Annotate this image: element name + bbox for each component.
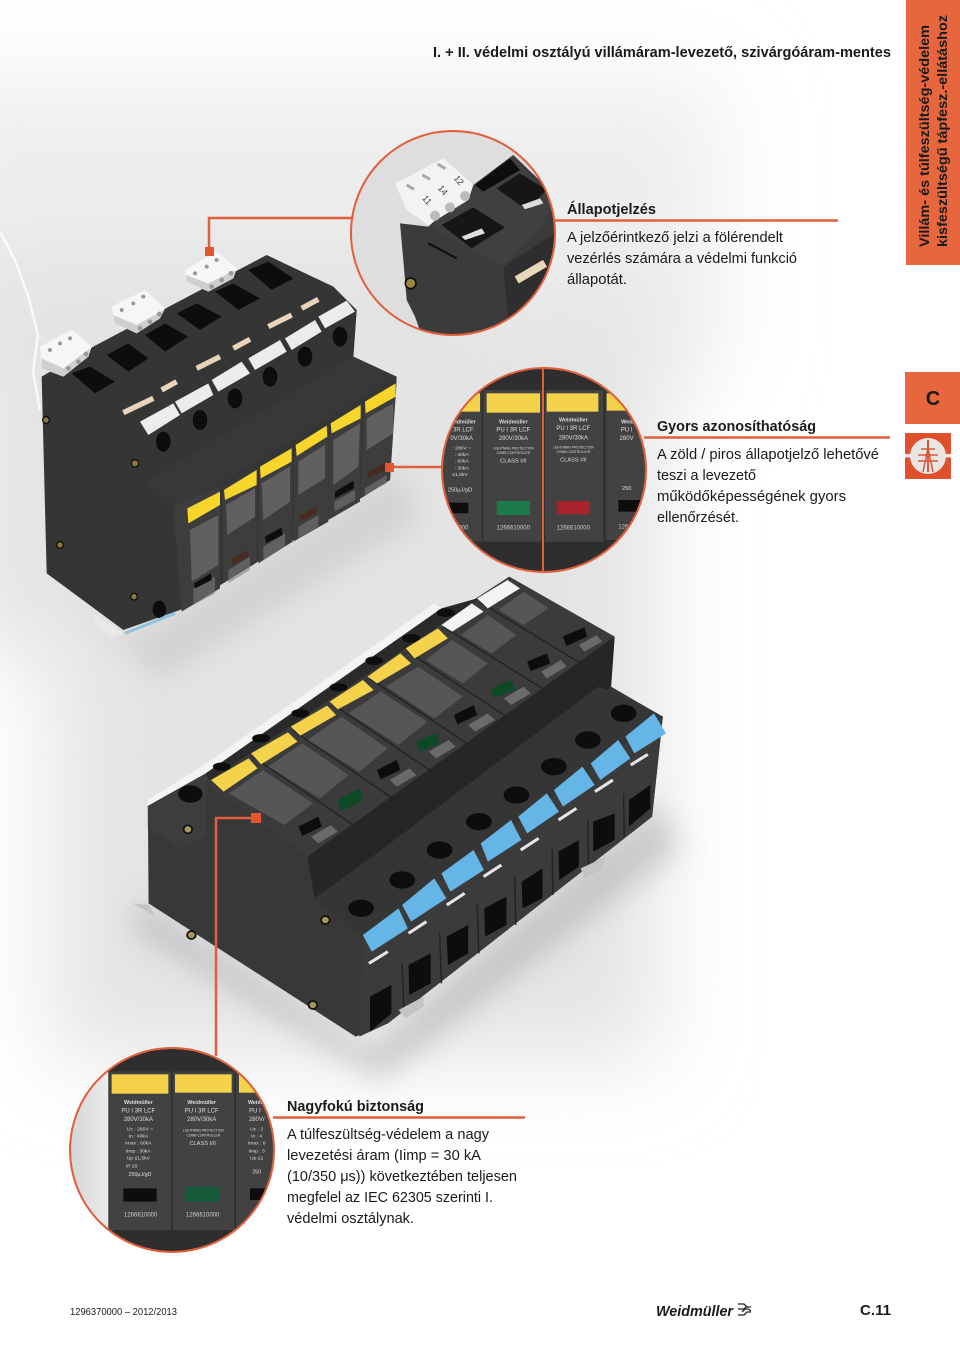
detail circle: green and red indicators: 250μJ/gD [448,488,472,494]
detail circle: green and red indicators: 250 [622,486,631,492]
text block: status signal [554,201,838,288]
brass screws [184,825,330,1009]
upper product photo: surge arrester with white terminals [40,252,397,638]
lower row front faces [359,717,663,1037]
title: I. + II. védelmi osztályú villámáram-levezető, szivárgóáram-mentes [433,45,891,61]
contact rods [123,299,318,413]
detail circle: green and red indicators: : 30kA [455,465,469,471]
yellow module labels [187,383,396,523]
detail circle: green and red indicators: : 40kA [455,452,469,458]
din rail blue strip [125,613,175,633]
text block: status signal: A jelzőérintkező jelzi a fölérendelt [567,230,783,246]
detail circle: module front: Up ≤1,5kV [127,1155,151,1161]
detail circle: green and red indicators: Weidmüller [499,419,528,425]
detail circle: green and red indicators: 280V [620,436,634,442]
connector line: safety [216,813,261,1056]
detail circle: green and red indicators: 1266610000 [497,525,531,531]
detail circle: module front: CLASS I/II [189,1141,216,1147]
din rail clips [132,857,606,1018]
detail circle: module front: Imax : 6 [248,1141,266,1147]
status windows [299,627,587,836]
detail circle: module front: Iimp : 30kA [126,1148,151,1154]
detail circle: green and red indicators: : 280V ~ [452,445,471,451]
detail circle: green and red indicators: COMB CONTROLLER [557,450,591,454]
detail circle: green and red indicators: COMB CONTROLLER [497,451,531,455]
sidebar chapter tab: Villám- és túlfeszültség-védelem [916,25,932,247]
detail circle: green and red indicators: 280V/30kA [559,435,588,441]
detail circle: signal terminal [350,130,556,336]
detail circle: green and red indicators: LIGHTNING PROTECTION [493,446,534,450]
detail circle: green and red indicators: LIGHTNING PROTECTION [553,445,594,449]
module divider lines [253,602,624,1010]
detail circle: green and red indicators: 126 [618,524,629,530]
detail circle: green and red indicators: CLASS I/II [500,459,527,465]
white module labels [441,580,520,632]
model numbers [311,635,602,843]
upper faceplates [206,578,615,857]
detail circle: module front: Weidmüller [124,1100,153,1106]
detail circle: green and red indicators: PU I 3R LCF [556,426,591,432]
lower product photo: surge arrester with blue labels [132,577,666,1037]
sidebar chapter tab: kisfeszültségű tápfesz.-ellátáshoz [934,15,950,247]
text block: high safety: levezetési áram (Iimp = 30 kA [287,1148,481,1164]
detail circle: module front: 280V/30kA [187,1117,216,1123]
detail circle: green and red indicators: PU I [621,428,633,434]
detail circle: module front: Weidmüller [187,1100,216,1106]
text block: high safety: megfelel az IEC 62305 szerinti I. [287,1190,493,1206]
detail circle: module front: In : 40kA [128,1134,149,1140]
rear test holes [213,608,455,771]
connector line: quick identification [385,463,444,472]
detail circle: green and red indicators: : 60kA [455,459,469,465]
white marker tags [140,301,355,435]
text block: quick identification: működőképességének gyors [657,489,846,505]
detail circle: module front: 250 [252,1169,261,1175]
text block: quick identification: A zöld / piros állapotjelző lehetővé [657,447,879,463]
text block: high safety [273,1099,525,1227]
white signal terminals [40,252,237,377]
text block: status signal: vezérlés számára a védelmi funkció [567,251,797,267]
footer logo: Weidmüller [656,1303,734,1320]
blue marker tags [363,713,666,952]
detail circle: module front: 280V/30kA [124,1117,153,1123]
section letter box [905,372,960,424]
icon: power pylon [905,433,951,479]
detail circle: signal terminal: 11 [420,193,434,207]
text block: high safety: Nagyfokú biztonság [287,1099,424,1115]
detail circle: module front: Up ≤1 [250,1155,264,1161]
text block: high safety: védelmi osztálynak. [287,1211,414,1227]
page number: C.11 [860,1302,891,1319]
white contact bars [369,754,648,963]
detail circle: module front: PU I 3R LCF [121,1108,156,1114]
detail circle: module front: Weidm [248,1100,266,1106]
text block: quick identification: Gyors azonosíthatóság [657,419,816,435]
white rear edge strip [148,603,441,806]
brass screws [43,417,139,600]
detail circle: module front: 280V/ [249,1117,265,1123]
detail circle: green and red indicators [441,367,647,573]
detail circle: signal terminal: 12 [452,173,466,187]
detail circle: green and red indicators: CLASS I/II [560,458,587,464]
detail circle: module front: 1266610000 [186,1213,220,1219]
detail circle: module front: LIGHTNING PROTECTION [183,1129,224,1133]
detail circle: module front: In : 4 [251,1134,262,1140]
detail circle: module front: Uc : 2 [250,1127,263,1133]
detail circle: green and red indicators: PU I 3R LCF [496,428,531,434]
lower modules faces [173,382,397,612]
status windows [194,481,354,588]
test holes [178,705,636,917]
text block: high safety: (10/350 μs)) következtében teljesen [287,1169,517,1185]
detail circle: module front: 250μJ/gD [129,1172,152,1178]
detail circle: green and red indicators: 1266610000 [557,525,591,531]
detail circle: green and red indicators: 3R LCF [453,428,474,434]
detail circle: module front: PU I 3R LCF [185,1108,219,1114]
test holes [153,327,347,618]
detail circle: module front: COMB CONTROLLER [187,1133,221,1137]
detail circle: module front: IP 20 [126,1163,138,1169]
detail circle: green and red indicators: 280V/30kA [499,436,528,442]
text block: status signal: Állapotjelzés [567,201,656,218]
yellow module labels [211,628,448,792]
detail circle: signal terminal: 14 [436,183,450,197]
detail circle: module front: 1266610000 [124,1213,158,1219]
text block: quick identification [644,419,890,526]
detail circle: green and red indicators: Weidm [621,419,639,425]
detail circle: module front: PU I [249,1108,261,1114]
dark rear band [206,578,509,782]
text block: high safety: A túlfeszültség-védelem a nagy [287,1127,490,1143]
text block: quick identification: ellenőrzését. [657,510,739,526]
printed label text areas [229,592,549,825]
detail circle: module front: Uc : 280V ~ [127,1127,153,1133]
detail circle: module front: Iimp : 3 [248,1148,265,1154]
footer order number: 1296370000 – 2012/2013 [70,1306,177,1318]
text block: quick identification: teszi a levezető [657,468,756,484]
detail circle: module front [69,1047,275,1253]
detail circle: green and red indicators: 000 [458,525,469,531]
lower row top surface [315,687,663,937]
detail circle: green and red indicators: ≤1,5kV [452,472,468,478]
connector line: status signal [205,218,352,256]
detail circle: green and red indicators: 0V/30kA [450,436,473,442]
printed label strips [190,403,393,605]
sidebar chapter tab [906,0,960,265]
front terminal openings [370,785,650,1032]
detail circle: module front: Imax : 60kA [125,1141,152,1147]
detail circle: green and red indicators: Weidmüller [447,419,476,425]
top terminal openings [72,262,293,393]
text block: status signal: állapotát. [567,272,627,288]
section letter box: C [926,388,940,410]
detail circle: green and red indicators: Weidmüller [559,418,588,424]
